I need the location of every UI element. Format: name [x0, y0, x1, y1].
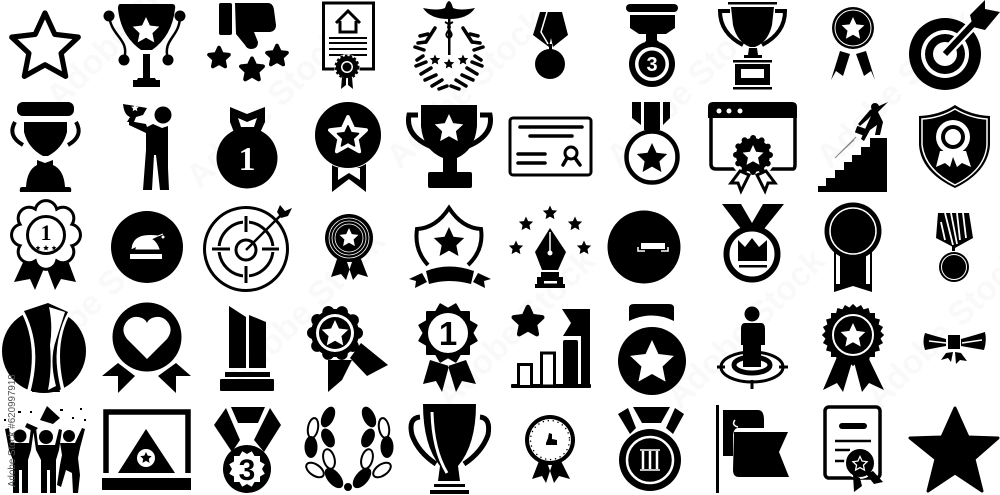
icon: cup with highlight — [411, 404, 489, 494]
icon: trophy with curly handles — [104, 4, 186, 87]
watermark: Adobe Stock — [429, 242, 603, 416]
icon: house certificate — [324, 3, 374, 89]
stock id text: Adobe Stock #620997918 — [7, 374, 18, 487]
watermark: Adobe Stock — [219, 222, 393, 396]
icon: crosshair target with arrow — [204, 205, 292, 290]
icon: flag on pole — [716, 405, 789, 493]
icon: star medal with ribbon — [626, 102, 678, 182]
icon: trophy with lid — [12, 102, 79, 192]
icon: outline star — [12, 13, 78, 76]
icon: medal number 3 — [626, 4, 678, 87]
icon: small medal — [533, 12, 568, 79]
icon: large trophy — [720, 2, 785, 90]
icon: star medal solid — [618, 304, 686, 395]
icon: medal number 3 with sunburst — [214, 407, 281, 493]
icon: shield with banner — [409, 208, 491, 288]
icon: target with arrow — [909, 0, 1000, 90]
watermark: Adobe Stock — [809, 2, 983, 176]
icon: first place rosette: 1 — [439, 315, 457, 352]
icon: businessman climbing stairs — [818, 102, 888, 192]
icon: certificate card — [510, 118, 591, 175]
icon: sunburst rosette — [822, 304, 884, 392]
icon: banded rosette — [325, 214, 373, 280]
icon: first place medal — [216, 107, 278, 188]
icon: medal number 3 with sunburst: 3 — [239, 454, 255, 487]
icon: thumb down with stars — [209, 3, 287, 79]
icon: celebrating people — [4, 406, 86, 493]
icon: bow tie — [924, 332, 986, 364]
icon: medal number 3: 3 — [646, 54, 658, 76]
icon: person on target — [717, 306, 788, 389]
icon: tilted rosette — [311, 309, 388, 392]
icon: laurel wreath — [304, 406, 393, 490]
icon: rosette number one: 1 — [40, 220, 52, 245]
icon: thumbs up rosette — [525, 415, 575, 483]
icon: first place rosette — [418, 303, 478, 392]
watermark: Adobe Stock — [9, 212, 183, 386]
icon: rosette number one — [12, 201, 80, 290]
icon: crown medal — [722, 204, 784, 280]
icon: circle with banner — [608, 210, 680, 284]
icon: caduceus laurel — [415, 1, 483, 89]
icon: circle with bell — [111, 211, 183, 283]
icon: star badge with ribbon — [314, 102, 382, 192]
watermark: Adobe Stock — [379, 2, 553, 176]
icon: roman three medal — [618, 407, 684, 491]
watermark: Adobe Stock — [179, 22, 353, 196]
watermark: Adobe Stock — [659, 242, 833, 416]
icon: striped medal — [936, 213, 973, 282]
icon: first place medal: 1 — [238, 141, 256, 178]
icon: star rosette ribbon — [831, 7, 875, 80]
icon: round badge with ribbon — [824, 202, 882, 292]
icon: shield with rosette — [919, 105, 990, 188]
icon: ball with central band — [2, 303, 86, 394]
icon: certificate with seal — [825, 407, 883, 492]
icon: browser window with award — [708, 102, 797, 191]
icon: heart badge — [102, 302, 191, 393]
icon: person holding trophy — [123, 104, 172, 190]
icon: fountain pen nib with stars — [509, 206, 591, 288]
icon: glass trophy — [220, 306, 274, 391]
icon: bars with star and flag — [511, 307, 591, 388]
icon: frame with pyramid — [102, 412, 191, 490]
watermark: Adobe Stock — [599, 2, 773, 176]
icon: trophy with star — [408, 105, 490, 188]
icon: solid star — [910, 408, 998, 491]
